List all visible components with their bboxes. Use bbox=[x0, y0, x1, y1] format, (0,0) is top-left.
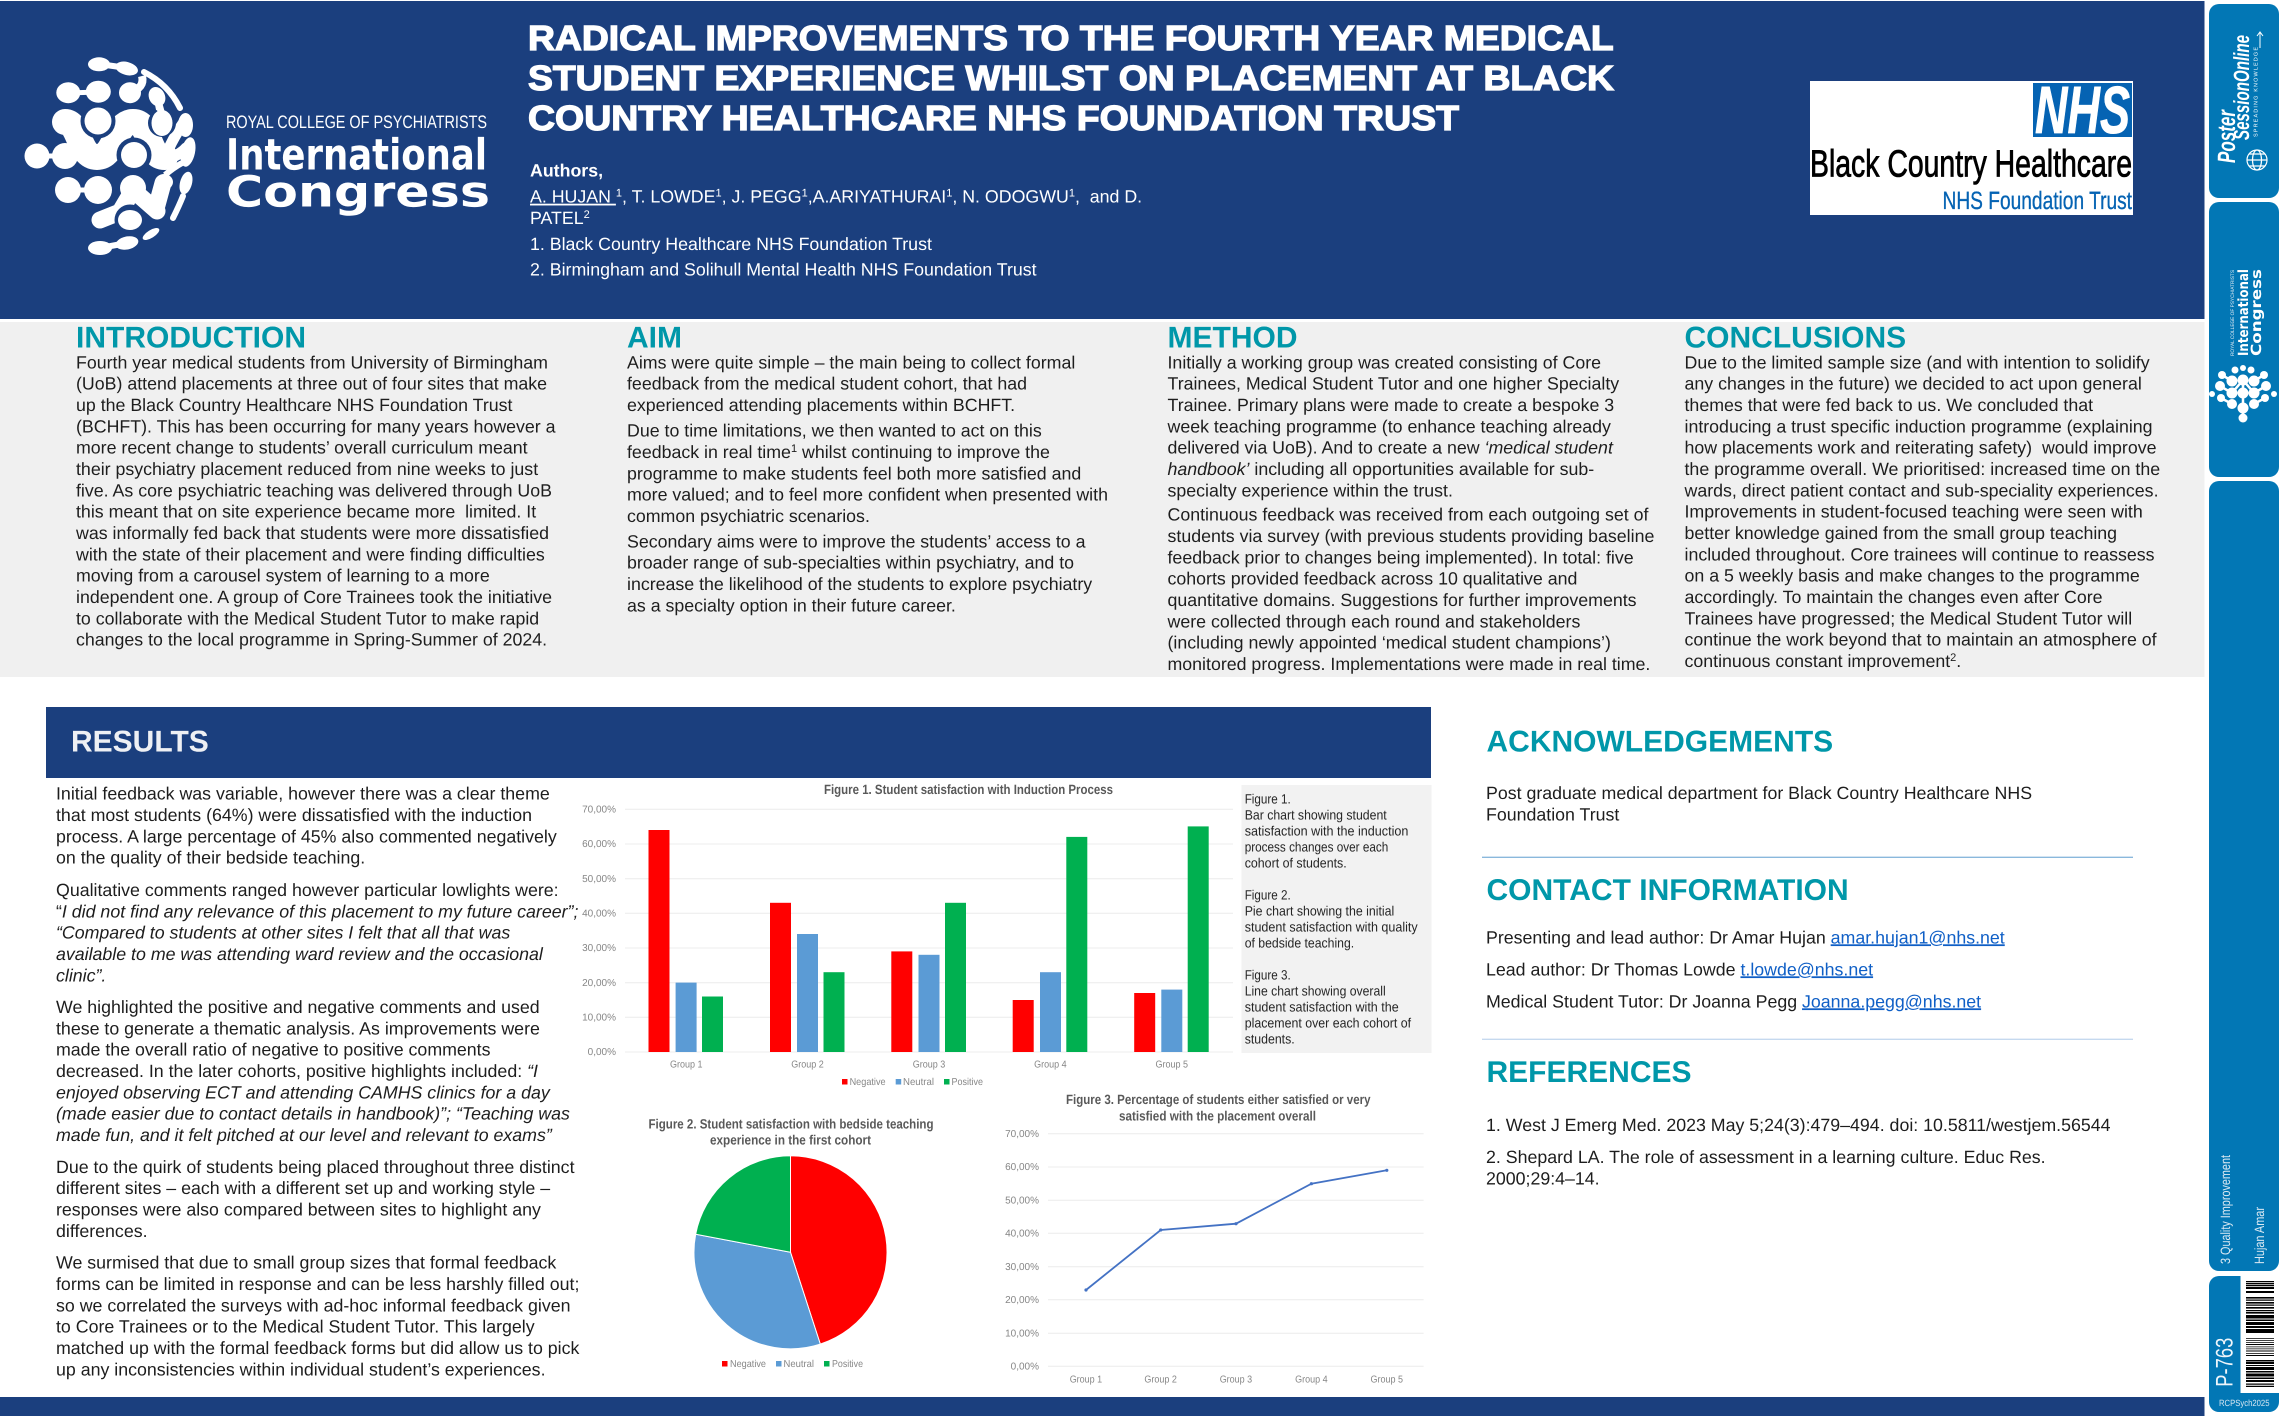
aim body text: broader range of sub-specialties within psychiatry, and to bbox=[627, 553, 1074, 573]
method body text: delivered via UoB). And to create a new ‘medical student bbox=[1168, 438, 1613, 458]
conference tag: RCPSych2025 bbox=[2219, 1398, 2270, 1408]
panel: figure captions: students. bbox=[1245, 1031, 1295, 1046]
data line bbox=[1084, 1169, 1388, 1292]
conclusions body text: Improvements in student-focused teaching were seen with bbox=[1684, 502, 2143, 522]
chart legend: Positive bbox=[952, 1077, 983, 1088]
sidebar tab: theme and author bbox=[2209, 481, 2279, 1271]
results body text: enjoyed observing ECT and attending CAMHS clinics for a day bbox=[56, 1082, 551, 1102]
sidebar tab: poster number and barcode bbox=[2209, 1276, 2279, 1412]
x axis labels: Group 3 bbox=[913, 1060, 946, 1070]
aim body text: 1 bbox=[791, 443, 797, 455]
introduction body text: (UoB) attend placements at three out of four sites that make bbox=[76, 374, 547, 394]
results body text: up any inconsistencies within individual student’s experiences. bbox=[56, 1359, 546, 1379]
method body text: handbook’ including all opportunities available for sub- bbox=[1168, 459, 1594, 479]
authors and affiliations: 1 bbox=[1069, 188, 1075, 200]
panel: figure captions: placement over each cohort of bbox=[1245, 1015, 1411, 1030]
reference list: 1. West J Emerg Med. 2023 May 5;24(3):479–494. doi: 10.5811/westjem.56544 bbox=[1486, 1115, 2111, 1135]
authors and affiliations bbox=[530, 160, 1142, 280]
logo: NHS Black Country Healthcare: NHS Foundation Trust bbox=[1942, 187, 2132, 215]
y axis labels: 0,00% bbox=[588, 1047, 616, 1058]
logo: NHS Black Country Healthcare: Black Country Healthcare bbox=[1810, 144, 2132, 186]
aim body text: whilst continuing to improve the bbox=[797, 442, 1050, 462]
sidebar tab: International Congress: ROYAL COLLEGE OF PSYCHIATRISTS bbox=[2230, 269, 2236, 356]
authors and affiliations: Authors, bbox=[530, 160, 603, 180]
method body text: students via survey (with previous students providing baseline bbox=[1168, 526, 1654, 546]
aim body text: Aims were quite simple – the main being to collect formal bbox=[627, 352, 1075, 372]
aim body text: increase the likelihood of the students to explore psychiatry bbox=[627, 574, 1092, 594]
results body text: Initial feedback was variable, however there was a clear theme bbox=[56, 784, 550, 804]
heading: introduction: INTRODUCTION bbox=[76, 322, 306, 354]
positive bars bbox=[702, 826, 1209, 1052]
y axis labels: 10,00% bbox=[582, 1012, 616, 1024]
chart legend bbox=[842, 1077, 983, 1088]
conclusions body text: introducing a trust specific induction programme (explaining bbox=[1684, 416, 2153, 436]
conclusions body text: accordingly. To maintain the changes even after Core bbox=[1684, 587, 2103, 607]
chart title: Figure 2. Student satisfaction with bedside teaching bbox=[648, 1116, 934, 1131]
results body text: responses were also compared between sites to highlight any bbox=[56, 1200, 541, 1220]
panel: figure captions bbox=[1242, 785, 1432, 1053]
results body text: We surmised that due to small group sizes that formal feedback bbox=[56, 1253, 556, 1273]
y axis labels: 20,00% bbox=[1005, 1295, 1039, 1306]
chart legend bbox=[722, 1359, 863, 1370]
footer band bbox=[0, 1397, 2204, 1416]
aim body text: feedback in real time bbox=[627, 442, 1050, 462]
logo wordmark bbox=[226, 112, 490, 218]
chart legend: Neutral bbox=[903, 1077, 934, 1088]
introduction body text: independent one. A group of Core Trainees took the initiative bbox=[76, 587, 552, 607]
aim body text: Due to time limitations, we then wanted to act on this bbox=[627, 421, 1042, 441]
chart title: Figure 3. Percentage of students either satisfied or very bbox=[1066, 1092, 1371, 1107]
logo: NHS Black Country Healthcare bbox=[1810, 73, 2133, 215]
introduction body text: with the state of their placement and were finding difficulties bbox=[75, 544, 545, 564]
conclusions body text: on a 5 weekly basis and make changes to the programme bbox=[1684, 566, 2140, 586]
authors and affiliations: 1 bbox=[616, 188, 622, 200]
authors and affiliations: 2. Birmingham and Solihull Mental Health NHS Foundation Trust bbox=[530, 260, 1037, 280]
conclusions body text: better knowledge gained from the small group teaching bbox=[1684, 523, 2117, 543]
method body text: cohorts provided feedback across 10 qualitative and bbox=[1168, 569, 1577, 589]
logo wordmark: Congress bbox=[226, 168, 490, 218]
chart legend: Negative bbox=[850, 1077, 886, 1088]
panel: references bbox=[1486, 1056, 2115, 1188]
authors and affiliations: , J. PEGG bbox=[722, 187, 802, 207]
conclusions body text: included throughout. Core trainees will continue to reassess bbox=[1684, 544, 2155, 564]
x axis labels: Group 2 bbox=[1144, 1374, 1177, 1385]
conclusions body text: continue the work beyond that to maintain an atmosphere of bbox=[1684, 630, 2157, 650]
panel: conclusions bbox=[1684, 322, 2165, 671]
y axis labels: 0,00% bbox=[1011, 1362, 1039, 1372]
reference list: 2. Shepard LA. The role of assessment in a learning culture. Educ Res. bbox=[1486, 1147, 2046, 1167]
x axis labels bbox=[1070, 1374, 1403, 1385]
results body text: clinic”. bbox=[56, 965, 106, 985]
y axis labels: 20,00% bbox=[582, 978, 616, 989]
negative bars bbox=[648, 830, 1155, 1052]
aim body text: feedback from the medical student cohort, that had bbox=[627, 374, 1027, 394]
conclusions body text: . bbox=[1956, 651, 1961, 671]
title: COUNTRY HEALTHCARE NHS FOUNDATION TRUST bbox=[528, 99, 1459, 138]
title: STUDENT EXPERIENCE WHILST ON PLACEMENT AT BLACK bbox=[528, 59, 1614, 98]
conclusions body text: any changes in the future) we decided to act upon general bbox=[1684, 374, 2142, 394]
aim body text: Secondary aims were to improve the students’ access to a bbox=[627, 531, 1086, 551]
heading: aim: AIM bbox=[627, 322, 682, 354]
sidebar tab: theme and author: Hujan Amar bbox=[2252, 1207, 2267, 1264]
results body text: process. A large percentage of 45% also commented negatively bbox=[56, 826, 557, 846]
x axis labels: Group 2 bbox=[791, 1060, 824, 1070]
pie chart: Figure 2 bedside teaching satisfaction bbox=[648, 1116, 937, 1370]
introduction body text: up the Black Country Healthcare NHS Foundation Trust bbox=[76, 395, 513, 415]
chart title: satisfied with the placement overall bbox=[1119, 1108, 1316, 1123]
chart legend: Negative bbox=[730, 1359, 766, 1370]
logo wordmark: International bbox=[226, 130, 487, 180]
aim body text: programme to make students feel both more satisfied and bbox=[627, 463, 1081, 483]
x axis labels: Group 3 bbox=[1220, 1374, 1253, 1385]
header band bbox=[0, 1, 2204, 319]
heading: contact information: CONTACT INFORMATION bbox=[1486, 874, 1849, 907]
title: RADICAL IMPROVEMENTS TO THE FOURTH YEAR MEDICAL bbox=[528, 19, 1613, 58]
results body text: decreased. In the later cohorts, positive highlights included: “I bbox=[56, 1061, 538, 1081]
method body text: Initially a working group was created consisting of Core bbox=[1168, 352, 1601, 372]
results body text: on the quality of their bedside teaching. bbox=[56, 848, 365, 868]
contact details: Medical Student Tutor: Dr Joanna Pegg Joanna.pegg@nhs.net bbox=[1486, 991, 1981, 1011]
results body text: these to generate a thematic analysis. As improvements were bbox=[56, 1018, 540, 1038]
authors and affiliations: , N. ODOGWU bbox=[952, 187, 1069, 207]
contact details: Lead author: Dr Thomas Lowde t.lowde@nhs.net bbox=[1486, 959, 1873, 979]
icon: globe bbox=[2247, 150, 2267, 170]
panel: figure captions: process changes over each bbox=[1245, 839, 1388, 854]
method body text: Trainee. Primary plans were made to create a bespoke 3 bbox=[1168, 395, 1614, 415]
heading: method: METHOD bbox=[1168, 322, 1298, 354]
sidebar tab: International Congress: Congress bbox=[2249, 269, 2265, 356]
chart title: experience in the first cohort bbox=[710, 1133, 871, 1148]
method body text: specialty experience within the trust. bbox=[1168, 480, 1453, 500]
results body text: forms can be limited in response and can be less harshly filled out; bbox=[56, 1274, 579, 1294]
authors and affiliations: , T. LOWDE bbox=[622, 187, 716, 207]
acknowledgements text: Post graduate medical department for Black Country Healthcare NHS bbox=[1486, 783, 2032, 803]
bar chart: Figure 1 student satisfaction with induction process bbox=[582, 782, 1233, 1088]
results body text: “Compared to students at other sites I felt that all that was bbox=[56, 923, 510, 943]
method body text: Continuous feedback was received from each outgoing set of bbox=[1168, 505, 1649, 525]
panel: figure captions: cohort of students. bbox=[1245, 855, 1347, 870]
authors and affiliations: PATEL bbox=[530, 208, 584, 228]
x axis labels: Group 5 bbox=[1370, 1374, 1403, 1385]
introduction body text: to collaborate with the Medical Student Tutor to make rapid bbox=[76, 608, 539, 628]
heading: references: REFERENCES bbox=[1486, 1056, 1692, 1089]
y axis labels: 60,00% bbox=[1005, 1162, 1039, 1173]
results body text: that most students (64%) were dissatisfied with the induction bbox=[56, 805, 532, 825]
panel: figure captions: Line chart showing overall bbox=[1245, 983, 1386, 998]
sidebar tab: theme and author: 3 Quality Improvement bbox=[2218, 1155, 2233, 1264]
panel: figure captions: of bedside teaching. bbox=[1245, 935, 1354, 950]
panel: acknowledgements bbox=[1486, 726, 2037, 824]
sidebar tab: International Congress: International bbox=[2236, 269, 2252, 356]
authors and affiliations: ,A.ARIYATHURAI bbox=[808, 187, 946, 207]
y axis labels: 70,00% bbox=[1005, 1129, 1039, 1140]
results header bar: RESULTS bbox=[71, 726, 209, 758]
y axis labels: 60,00% bbox=[582, 839, 616, 850]
neutral bars bbox=[676, 934, 1182, 1052]
method body text: quantitative domains. Suggestions for further improvements bbox=[1168, 590, 1637, 610]
chart legend: Neutral bbox=[784, 1359, 814, 1370]
heading: acknowledgements: ACKNOWLEDGEMENTS bbox=[1486, 726, 1833, 759]
results body text: (made easier due to contact details in handbook)”; “Teaching was bbox=[56, 1104, 570, 1124]
icon: molecular brain globe bbox=[24, 57, 198, 255]
aim body text: common psychiatric scenarios. bbox=[627, 506, 870, 526]
method body text: (including newly appointed ‘medical student champions’) bbox=[1168, 633, 1611, 653]
x axis labels: Group 1 bbox=[1070, 1374, 1103, 1385]
icon: molecular dome bbox=[2209, 365, 2277, 422]
panel: figure captions: Figure 2. bbox=[1245, 887, 1291, 902]
chart legend: Positive bbox=[832, 1359, 863, 1370]
x axis labels: Group 4 bbox=[1034, 1060, 1067, 1070]
aim body text: more valued; and to feel more confident when presented with bbox=[627, 485, 1108, 505]
method body text: feedback prior to changes being implemented). In total: five bbox=[1168, 547, 1634, 567]
panel: figure captions: student satisfaction with the bbox=[1245, 999, 1399, 1014]
authors and affiliations: 1 bbox=[715, 188, 722, 200]
authors and affiliations: 1 bbox=[802, 188, 808, 200]
heading: conclusions: CONCLUSIONS bbox=[1684, 322, 1906, 354]
introduction body text: Fourth year medical students from University of Birmingham bbox=[76, 352, 548, 372]
panel: figure captions: satisfaction with the induction bbox=[1245, 823, 1408, 838]
panel: figure captions: Bar chart showing student bbox=[1245, 807, 1387, 822]
sidebar tab: Poster Session Online: SPREADING KNOWLEDGE bbox=[2254, 47, 2260, 137]
x axis labels: Group 1 bbox=[670, 1060, 703, 1070]
top text band background bbox=[0, 322, 2204, 677]
results body text: Qualitative comments ranged however particular lowlights were: bbox=[56, 880, 559, 900]
results body text: differences. bbox=[56, 1221, 148, 1241]
results body text: “I did not find any relevance of this placement to my future career”; bbox=[56, 901, 578, 921]
y axis labels bbox=[1005, 1129, 1039, 1372]
logo: Royal College of Psychiatrists International Congress bbox=[24, 57, 490, 255]
aim body text: as a specialty option in their future career. bbox=[627, 595, 956, 615]
y axis labels: 50,00% bbox=[1005, 1196, 1039, 1206]
aim body text: experienced attending placements within BCHFT. bbox=[627, 395, 1015, 415]
panel: figure captions: student satisfaction with quality bbox=[1245, 919, 1418, 934]
y axis labels: 70,00% bbox=[582, 804, 616, 816]
introduction body text: their psychiatry placement reduced from nine weeks to just bbox=[76, 459, 538, 479]
results body text: available to me was attending ward review and the occasional bbox=[56, 944, 544, 964]
pie slices bbox=[694, 1156, 887, 1349]
y axis labels: 30,00% bbox=[1005, 1262, 1039, 1273]
method body text: Trainees, Medical Student Tutor and one higher Specialty bbox=[1168, 374, 1619, 394]
panel: aim bbox=[627, 322, 1113, 615]
results body text: made fun, and it felt pitched at our level and relevant to exams” bbox=[56, 1125, 553, 1145]
authors and affiliations: 2 bbox=[584, 209, 590, 221]
method body text: were collected through each round and stakeholders bbox=[1166, 611, 1580, 631]
x axis labels: Group 4 bbox=[1295, 1374, 1328, 1385]
authors and affiliations: A. HUJAN bbox=[530, 187, 616, 207]
introduction body text: (BCHFT). This has been occurring for many years however a bbox=[76, 416, 556, 436]
barcode bbox=[2240, 1276, 2279, 1393]
reference list: 2000;29:4–14. bbox=[1486, 1168, 1600, 1188]
sidebar tab: Poster Session Online bbox=[2209, 4, 2279, 198]
sidebar tab: Poster Session Online: Poster bbox=[2213, 109, 2241, 163]
acknowledgements text: Foundation Trust bbox=[1486, 804, 1619, 824]
panel: contact information bbox=[1486, 874, 2010, 1011]
authors and affiliations: , and D. bbox=[1075, 187, 1142, 207]
conclusions body text: how placements work and reiterating safety) would improve bbox=[1684, 438, 2157, 458]
conclusions body text: continuous constant improvement bbox=[1684, 651, 1961, 671]
conclusions body text: wards, direct patient contact and sub-speciality experiences. bbox=[1684, 480, 2158, 500]
introduction body text: this meant that on site experience became more limited. It bbox=[76, 502, 536, 522]
results body text: different sites – each with a different set up and working style – bbox=[56, 1178, 550, 1198]
introduction body text: was informally fed back that students were more dissatisfied bbox=[75, 523, 549, 543]
x axis labels bbox=[670, 1060, 1188, 1070]
introduction body text: moving from a carousel system of learning to a more bbox=[76, 566, 490, 586]
results header bar bbox=[46, 707, 1431, 778]
conclusions body text: themes that were fed back to us. We concluded that bbox=[1684, 395, 2093, 415]
conclusions body text: the programme overall. We prioritised: increased time on the bbox=[1684, 459, 2160, 479]
panel: figure captions: Figure 1. bbox=[1245, 791, 1291, 806]
results body text: so we correlated the surveys with ad-hoc informal feedback given bbox=[56, 1295, 570, 1315]
y axis labels: 40,00% bbox=[1005, 1228, 1039, 1240]
results body text: Due to the quirk of students being placed throughout three distinct bbox=[56, 1157, 575, 1177]
y axis labels: 50,00% bbox=[582, 874, 616, 885]
introduction body text: changes to the local programme in Spring-Summer of 2024. bbox=[76, 630, 547, 650]
poster number: P-763 bbox=[2212, 1338, 2239, 1387]
logo: NHS Black Country Healthcare: NHS bbox=[2035, 73, 2130, 148]
panel: figure captions: Figure 3. bbox=[1245, 967, 1291, 982]
results body text: matched up with the formal feedback forms but did allow us to pick bbox=[56, 1338, 579, 1358]
panel: figure captions: Pie chart showing the initial bbox=[1245, 903, 1394, 918]
results body text: to Core Trainees or to the Medical Student Tutor. This largely bbox=[56, 1317, 535, 1337]
y axis labels bbox=[582, 804, 616, 1058]
conclusions body text: Due to the limited sample size (and with intention to solidify bbox=[1684, 352, 2150, 372]
panel: method bbox=[1166, 322, 1659, 674]
method body text: monitored progress. Implementations were made in real time. bbox=[1168, 654, 1650, 674]
chart title: Figure 1. Student satisfaction with Induction Process bbox=[824, 782, 1113, 797]
method body text: week teaching programme (to enhance teaching already bbox=[1166, 416, 1611, 436]
panel: introduction bbox=[75, 322, 560, 650]
introduction body text: more recent change to students’ overall curriculum meant bbox=[76, 438, 528, 458]
conclusions body text: Trainees have progressed; the Medical Student Tutor will bbox=[1684, 608, 2132, 628]
results body text: made the overall ratio of negative to positive comments bbox=[56, 1040, 491, 1060]
logo wordmark: ROYAL COLLEGE OF PSYCHIATRISTS bbox=[226, 112, 487, 132]
authors and affiliations: 1 bbox=[946, 188, 952, 200]
introduction body text: five. As core psychiatric teaching was delivered through UoB bbox=[76, 480, 552, 500]
y axis labels: 10,00% bbox=[1005, 1328, 1039, 1340]
conclusions body text: 2 bbox=[1950, 652, 1956, 664]
x axis labels: Group 5 bbox=[1156, 1060, 1188, 1070]
contact details: Presenting and lead author: Dr Amar Hujan amar.hujan1@nhs.net bbox=[1486, 927, 2005, 947]
authors and affiliations: 1. Black Country Healthcare NHS Foundation Trust bbox=[530, 234, 932, 254]
results body text: We highlighted the positive and negative comments and used bbox=[56, 997, 540, 1017]
y axis labels: 40,00% bbox=[582, 908, 616, 920]
line chart: Figure 3 satisfied with placement overall bbox=[1005, 1092, 1424, 1385]
y axis labels: 30,00% bbox=[582, 943, 616, 954]
sidebar tab: International Congress bbox=[2209, 202, 2279, 477]
